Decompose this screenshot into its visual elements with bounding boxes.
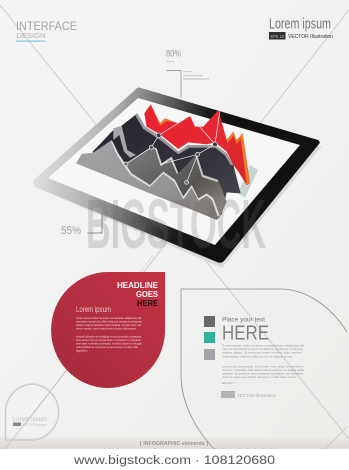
front grey area xyxy=(76,140,220,220)
body text: Lorem ipsum dolor sit amet, consectetur adipiscing elit, xyxy=(76,316,142,320)
data line with markers xyxy=(124,110,220,184)
heading: interface design: INTERFACE xyxy=(16,20,77,33)
body text: Duis autem vel eum iriure dolor in hendrerit in vulputate xyxy=(76,338,142,342)
text block: here: exercitation ullamco laboris nisi ut aliquip ex ea xyxy=(222,354,292,358)
red teardrop panel: GOES xyxy=(136,290,159,299)
body text: suscipit lobortis nisl ut aliquip ex ea commodo consequat. xyxy=(76,334,142,338)
callout: 55%: 55% xyxy=(61,225,81,237)
red area xyxy=(144,104,250,185)
text block: here: magna aliqua. Ut enim ad minim veniam, quis nostrud xyxy=(222,350,302,354)
dark area xyxy=(93,113,241,215)
text block: here xyxy=(221,316,305,398)
text block: here: sed do eiusmod tempor incididunt ut labore et dolore xyxy=(222,347,303,351)
text block: here: laborum." xyxy=(222,381,235,385)
body text: nulla facilisis at vero eros et accumsan et iusto odio xyxy=(76,345,139,349)
heading: interface design: DESIGN xyxy=(16,31,46,40)
tablet xyxy=(33,88,320,263)
small teardrop logo: VECTOR Illustration xyxy=(22,423,47,427)
body text xyxy=(76,316,142,352)
heading: interface design xyxy=(16,20,77,42)
outline panel xyxy=(181,289,347,449)
small teardrop logo xyxy=(6,384,59,440)
text block: here: derit in voluptate velit esse cillum dolore eu fugiat nulla xyxy=(222,368,304,372)
tablet bezel xyxy=(33,88,320,263)
heading: lorem ipsum: EPS 10 xyxy=(270,34,284,40)
tablet screen xyxy=(48,98,300,245)
red teardrop panel: HERE xyxy=(137,299,159,308)
text block: here: "Lorem ipsum dolor sit amet, consectetuer adipiscing elit, xyxy=(222,344,305,348)
text block: here: VECTOR Illustration xyxy=(237,393,276,398)
callout: 80% xyxy=(166,48,209,98)
body text: minim veniam, quis nostrud exerci tation ullamcorper xyxy=(76,326,136,330)
text block: here: Place your text xyxy=(222,316,265,324)
text block: here: sunt in culpa qui officia deserunt mollit anim id est xyxy=(222,375,296,379)
heading: lorem ipsum xyxy=(269,16,333,40)
body text: velit esse molestie consequat, vel illum dolore eu feugiat xyxy=(76,342,142,346)
tablet shadow xyxy=(33,146,322,268)
mid grey area xyxy=(125,147,227,217)
body text: dignissim. xyxy=(76,348,88,352)
callout: 80%: 80% xyxy=(166,48,181,60)
text block: here: HERE xyxy=(222,322,269,344)
footer strip xyxy=(0,449,349,470)
text block: here: pariatur. Excepteur sint occaecat cupidatat non proident, xyxy=(222,372,304,376)
body text: sed diam nonummy nibh euismod tincidunt ut laoreet xyxy=(76,320,142,324)
3D area chart xyxy=(76,104,250,220)
heading: lorem ipsum: VECTOR Illustration xyxy=(288,34,333,40)
headline: HEADLINE xyxy=(117,281,159,290)
subhead: Lorem ipsum xyxy=(76,305,111,314)
legend squares xyxy=(204,316,215,360)
chart shadow plate xyxy=(238,165,258,198)
red teardrop panel xyxy=(25,255,165,425)
bottom band xyxy=(0,437,349,449)
small teardrop logo: Lorem ipsum xyxy=(13,416,47,423)
footer label: [ INFOGRAPHIC elements ] xyxy=(140,441,208,447)
footer credit: www.bigstock.com · 108120680 xyxy=(73,453,275,467)
body text: dolore magna aliquam erat volutpat. Ut wisi enim ad xyxy=(76,323,142,327)
callout: 55% xyxy=(61,214,102,237)
text block: here: commodo consequat. Duis aute irure dolor in reprehen- xyxy=(222,364,304,368)
